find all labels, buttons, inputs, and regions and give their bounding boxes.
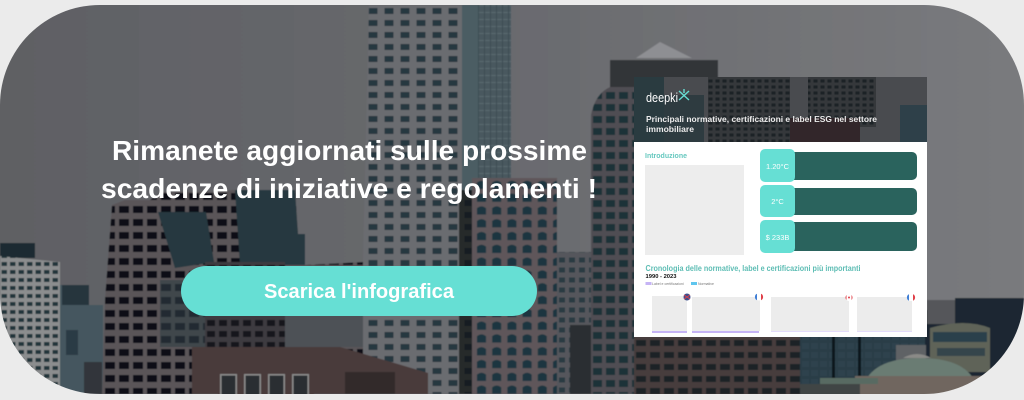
stat row: $ 233B: $ 233B (766, 233, 789, 242)
stat row: $ 233B (760, 220, 917, 253)
stat row: 2°C: 2°C (771, 197, 784, 206)
far left white building (0, 243, 103, 394)
legend: Label e certificazioni (652, 282, 684, 286)
icon: Canadian flag (845, 294, 853, 301)
front building with arched windows (472, 178, 557, 394)
dome building (800, 354, 985, 396)
central round tower (363, 5, 511, 394)
logo: deepki: deepki (646, 91, 678, 105)
legend (646, 282, 714, 286)
preview title (646, 114, 877, 134)
heading: scadenze di iniziative e regolamenti ! (101, 173, 597, 204)
timeline years: 1990 - 2023 (646, 274, 676, 280)
timeline card 4 (857, 297, 912, 332)
preview white sheet (634, 142, 927, 337)
left skyscraper (102, 190, 365, 394)
small mid building (557, 252, 592, 394)
stat row: 1.20°C (760, 149, 917, 182)
preview header (634, 77, 927, 142)
icon: French flag (907, 294, 915, 301)
intro heading: Introduzione (645, 151, 687, 160)
button: download infographic: Scarica l'infografica (264, 281, 455, 303)
stat row: 1.20°C: 1.20°C (766, 162, 790, 171)
infographic preview (634, 77, 927, 337)
timeline heading: Cronologia delle normative, label e certificazioni più importanti (646, 263, 860, 273)
preview title: Principali normative, certificazioni e label ESG nel settore (646, 114, 877, 124)
icon: French flag (755, 294, 763, 300)
heading: Rimanete aggiornati sulle prossime (112, 135, 587, 166)
lower brick facade under preview (634, 332, 801, 394)
icon: UK flag (684, 294, 690, 300)
preview title: immobiliare (646, 124, 694, 134)
timeline card 2 (692, 297, 760, 333)
button: download infographic (181, 266, 537, 316)
heading (101, 135, 597, 204)
timeline card 1 (652, 296, 687, 333)
brick building (192, 347, 428, 395)
stat row: 2°C (760, 185, 917, 217)
lower right dark towers (800, 298, 1024, 394)
timeline card 3 (771, 297, 849, 332)
intro placeholder (645, 165, 744, 255)
right round tower with crown (590, 42, 718, 394)
legend: Normative (698, 282, 714, 286)
